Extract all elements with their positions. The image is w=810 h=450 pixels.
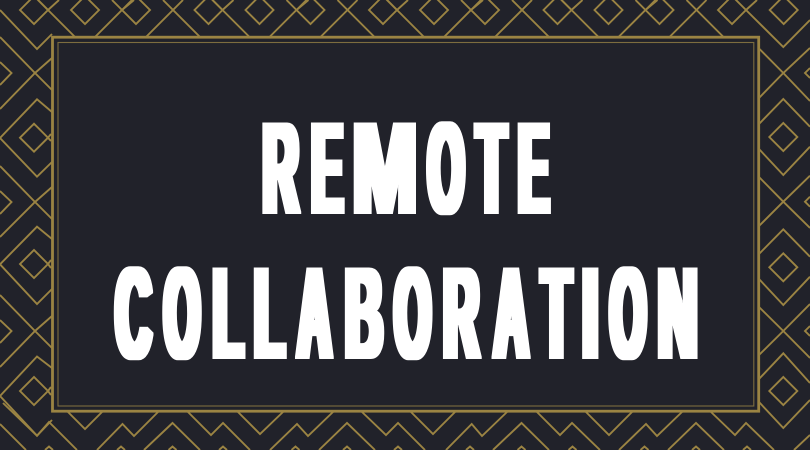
title line 2: T (542, 240, 571, 386)
left pattern strip (0, 10, 52, 436)
title line 2: C (116, 240, 151, 386)
title: REMOTE COLLABORATION: E (519, 95, 549, 241)
title line 2: L (213, 240, 243, 386)
right pattern strip (759, 48, 810, 450)
title line 2: A (298, 240, 331, 386)
title: REMOTE COLLABORATION (116, 95, 697, 386)
title line 2: O (610, 240, 646, 386)
central panel with double gold frame (52, 37, 759, 411)
title line 2: O (395, 240, 430, 386)
title line 1: O (428, 95, 464, 241)
title line 2: O (164, 240, 200, 386)
title line 1: M (352, 95, 417, 241)
title line 1: T (477, 95, 506, 241)
title line 1: R (263, 95, 298, 241)
title line 1: E (312, 95, 342, 241)
bottom pattern strip (0, 403, 774, 450)
text: N (658, 240, 697, 386)
title line 2: B (345, 240, 383, 386)
title line 2: R (444, 240, 479, 386)
title line 2: L (254, 240, 284, 386)
title line 2: I (582, 240, 598, 386)
title line 2: A (494, 240, 528, 386)
top pattern strip (20, 0, 810, 47)
